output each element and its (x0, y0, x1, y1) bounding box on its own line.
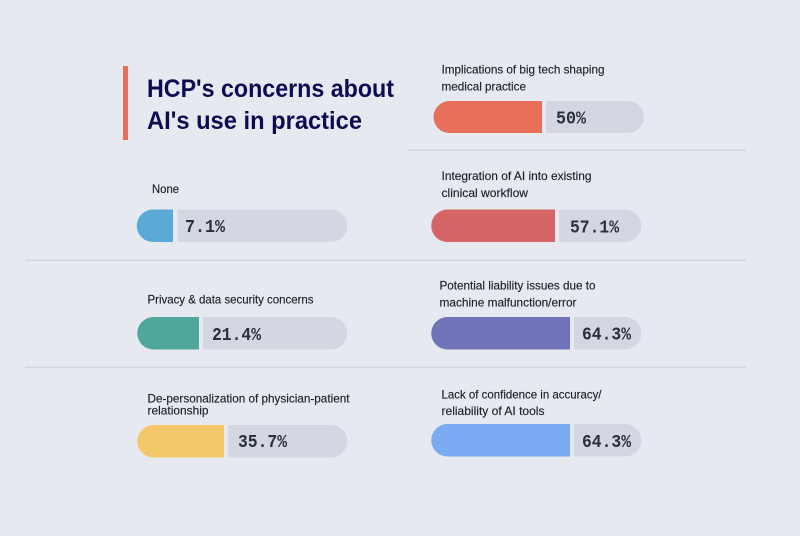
label: Privacy & data security concerns (148, 292, 314, 306)
label (442, 388, 602, 418)
panel: implications of big tech (434, 62, 644, 133)
panel: privacy (137, 292, 347, 350)
title block (123, 66, 395, 140)
label: clinical workflow (442, 186, 528, 200)
bar: 64.3% (431, 424, 641, 456)
panel: de-personalization (137, 392, 350, 458)
panel: potential liability (431, 278, 641, 350)
panel: none (137, 182, 347, 242)
label (148, 392, 350, 418)
bar: 57.1%: 57.1% (570, 218, 619, 238)
panel: lack of confidence (431, 388, 641, 456)
label: Lack of confidence in accuracy/ (442, 388, 602, 402)
label: reliability of AI tools (442, 404, 544, 418)
label: None (152, 182, 179, 196)
label: De-personalization of physician-patient (148, 392, 350, 406)
label: relationship (148, 404, 209, 418)
bar: 50%: 50% (556, 110, 586, 130)
title accent bar (123, 66, 128, 140)
panel: integration of AI (431, 169, 641, 242)
label (440, 278, 596, 310)
bar: 57.1% (431, 210, 641, 242)
label: Potential liability issues due to (440, 278, 596, 292)
label (442, 169, 592, 200)
bar: 7.1% (137, 210, 347, 242)
title: AI's use in practice (147, 107, 362, 135)
bar: 21.4% (137, 317, 347, 350)
bar: 35.7% (137, 425, 347, 458)
label: machine malfunction/error (440, 296, 576, 310)
bar: 64.3%: 64.3% (582, 433, 631, 453)
title (147, 75, 395, 135)
bar: 21.4%: 21.4% (212, 326, 261, 346)
label (442, 62, 604, 94)
bar: 64.3%: 64.3% (582, 326, 631, 346)
label: medical practice (442, 80, 526, 94)
label: Integration of AI into existing (442, 169, 592, 183)
title: HCP's concerns about (147, 75, 395, 103)
bar: 35.7%: 35.7% (238, 433, 287, 453)
label: Implications of big tech shaping (442, 62, 604, 76)
bar: 50% (434, 101, 644, 133)
bar: 7.1%: 7.1% (185, 218, 225, 238)
bar: 64.3% (431, 317, 641, 350)
